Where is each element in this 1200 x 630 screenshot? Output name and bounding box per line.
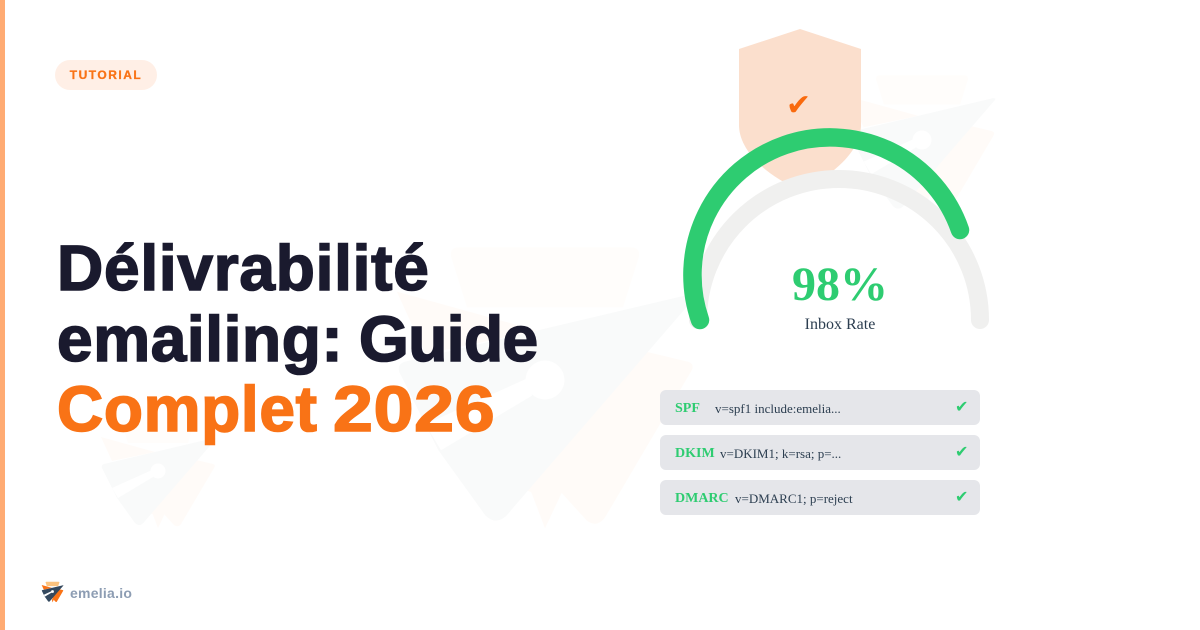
title: emailing: xyxy=(57,302,343,374)
shield icon with check xyxy=(739,29,861,181)
record row: SPF: SPF xyxy=(675,401,700,416)
record row: DKIM xyxy=(660,435,980,470)
title: Complet xyxy=(57,373,318,445)
gauge: inbox rate arc xyxy=(683,128,989,330)
record row: SPF xyxy=(660,390,980,425)
record row: DKIM: DKIM xyxy=(675,446,715,461)
gauge value: 98% xyxy=(792,258,888,311)
record row: SPF: v=spf1 include:emelia... xyxy=(715,401,841,416)
title: Délivrabilité xyxy=(57,232,430,304)
record row: DMARC xyxy=(660,480,980,515)
title: 2026 xyxy=(333,373,495,445)
title: Guide xyxy=(359,302,538,374)
shield icon with check: ✔ xyxy=(786,88,811,123)
record row: DKIM: ✔ xyxy=(955,442,968,461)
title xyxy=(57,232,538,446)
badge: tutorial: TUTORIAL xyxy=(70,68,142,82)
record row: DMARC: v=DMARC1; p=reject xyxy=(735,491,853,506)
gauge label: Inbox Rate xyxy=(805,316,875,333)
brand name: emelia.io xyxy=(70,585,132,601)
footer logo xyxy=(42,582,132,602)
accent bar xyxy=(0,0,5,630)
record row: DMARC: DMARC xyxy=(675,491,729,506)
badge: tutorial xyxy=(55,60,157,90)
record row: DKIM: v=DKIM1; k=rsa; p=... xyxy=(720,446,841,461)
icon: emelia logo xyxy=(42,582,64,602)
record row: SPF: ✔ xyxy=(955,397,968,416)
record row: DMARC: ✔ xyxy=(955,487,968,506)
